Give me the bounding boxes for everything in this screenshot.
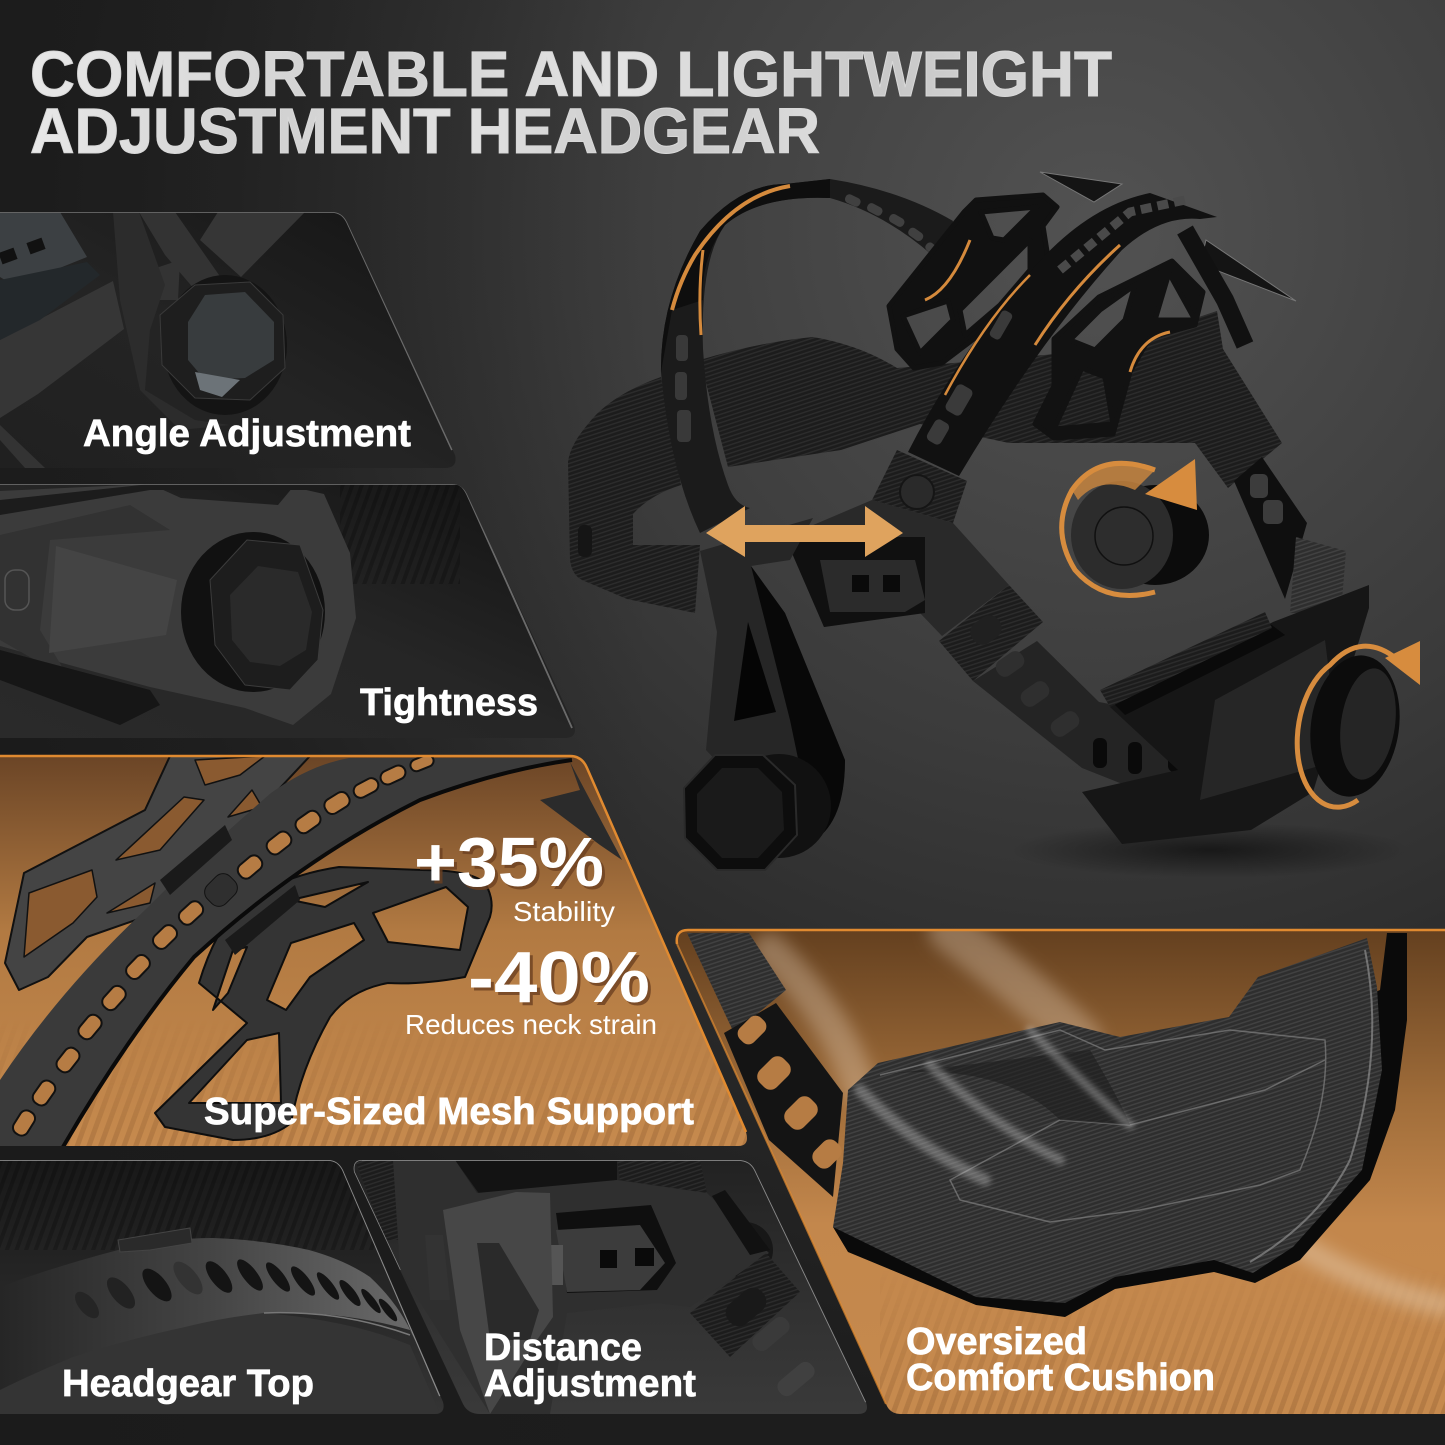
stat: -40% neck strain: Reduces neck strain	[405, 1009, 657, 1040]
label: tightness: Tightness	[360, 682, 538, 724]
label: distance adjustment	[484, 1327, 696, 1405]
left fabric strap	[687, 933, 786, 1033]
lower mesh	[155, 867, 492, 1140]
corner bracket	[540, 762, 622, 860]
fabric patch	[690, 1253, 800, 1357]
tightness body	[0, 484, 356, 725]
arm and pivot	[700, 518, 845, 858]
stat: +35% stability: Stability	[513, 896, 615, 927]
label: oversized comfort cushion	[906, 1321, 1215, 1399]
floor shadow	[1010, 822, 1410, 878]
panel: distance adjustment	[350, 1160, 880, 1420]
stat: +35% stability: +35%	[417, 826, 607, 904]
arm	[443, 1192, 553, 1414]
panel: oversized comfort cushion	[670, 930, 1445, 1420]
slider	[556, 1205, 676, 1293]
fabric	[0, 281, 124, 418]
center dial	[1071, 481, 1209, 589]
tightness dial	[181, 532, 325, 692]
title	[30, 38, 1112, 167]
slider block	[0, 213, 87, 279]
lower right strap	[973, 641, 1200, 806]
fabric connector	[872, 450, 967, 523]
mesh support rear	[889, 195, 1057, 368]
top fabric and curves	[355, 1160, 400, 1240]
left octagonal dial	[684, 755, 797, 870]
mesh support front	[1035, 261, 1203, 438]
stat: -40% neck strain	[405, 938, 657, 1040]
clip tab	[118, 1228, 192, 1252]
panel: tightness	[0, 484, 580, 738]
title: ADJUSTMENT HEADGEAR	[30, 95, 820, 167]
rear fabric band	[568, 377, 700, 613]
title: COMFORTABLE AND LIGHTWEIGHT	[30, 38, 1112, 110]
label: distance adjustment: Distance	[484, 1327, 642, 1369]
air flow streaks	[770, 930, 1445, 1305]
right black frame	[833, 933, 1407, 1317]
second top strap	[908, 193, 1217, 476]
lower fabric patch	[939, 585, 1043, 681]
right body	[1082, 585, 1369, 844]
upper mesh	[5, 756, 310, 990]
diamond pieces	[1040, 172, 1122, 202]
panel: angle adjustment	[0, 212, 460, 468]
left arch strap	[661, 179, 953, 533]
label: oversized comfort cushion: Comfort Cushion	[906, 1357, 1215, 1399]
stat: -40% neck strain: -40%	[471, 941, 653, 1021]
panel: super-sized mesh support	[0, 753, 760, 1150]
ear cushion	[1290, 537, 1346, 613]
lower curve zone	[131, 1313, 396, 1340]
cushion	[833, 938, 1382, 1303]
side plate	[393, 1160, 769, 1414]
top band	[0, 1238, 415, 1390]
stat: +35% stability: +35%	[414, 823, 604, 901]
head fabric strap	[700, 311, 1282, 488]
label: distance adjustment: Adjustment	[484, 1363, 696, 1405]
label: angle adjustment: Angle Adjustment	[83, 413, 411, 455]
arm	[113, 212, 230, 430]
orange arrow: center dial rotation	[1062, 459, 1197, 596]
stat: -40% neck strain: -40%	[468, 938, 650, 1018]
side plate	[785, 500, 1009, 636]
label: headgear top: Headgear Top	[62, 1363, 314, 1405]
orange double arrow: distance adjustment	[706, 506, 903, 557]
black strap with holes	[724, 1003, 845, 1197]
main headgear illustration	[568, 172, 1420, 878]
panel: headgear top	[0, 1160, 450, 1414]
orange arrow: right dial rotation	[1297, 641, 1420, 807]
right dial	[1302, 650, 1408, 802]
slider	[785, 537, 925, 627]
stat: +35% stability	[414, 823, 615, 927]
perforated band	[0, 753, 572, 1147]
angle dial	[163, 275, 287, 415]
label: oversized comfort cushion: Oversized	[906, 1321, 1087, 1363]
label: super-sized mesh support: Super-Sized Mesh Support	[204, 1091, 694, 1133]
upper right strap	[1234, 457, 1307, 599]
